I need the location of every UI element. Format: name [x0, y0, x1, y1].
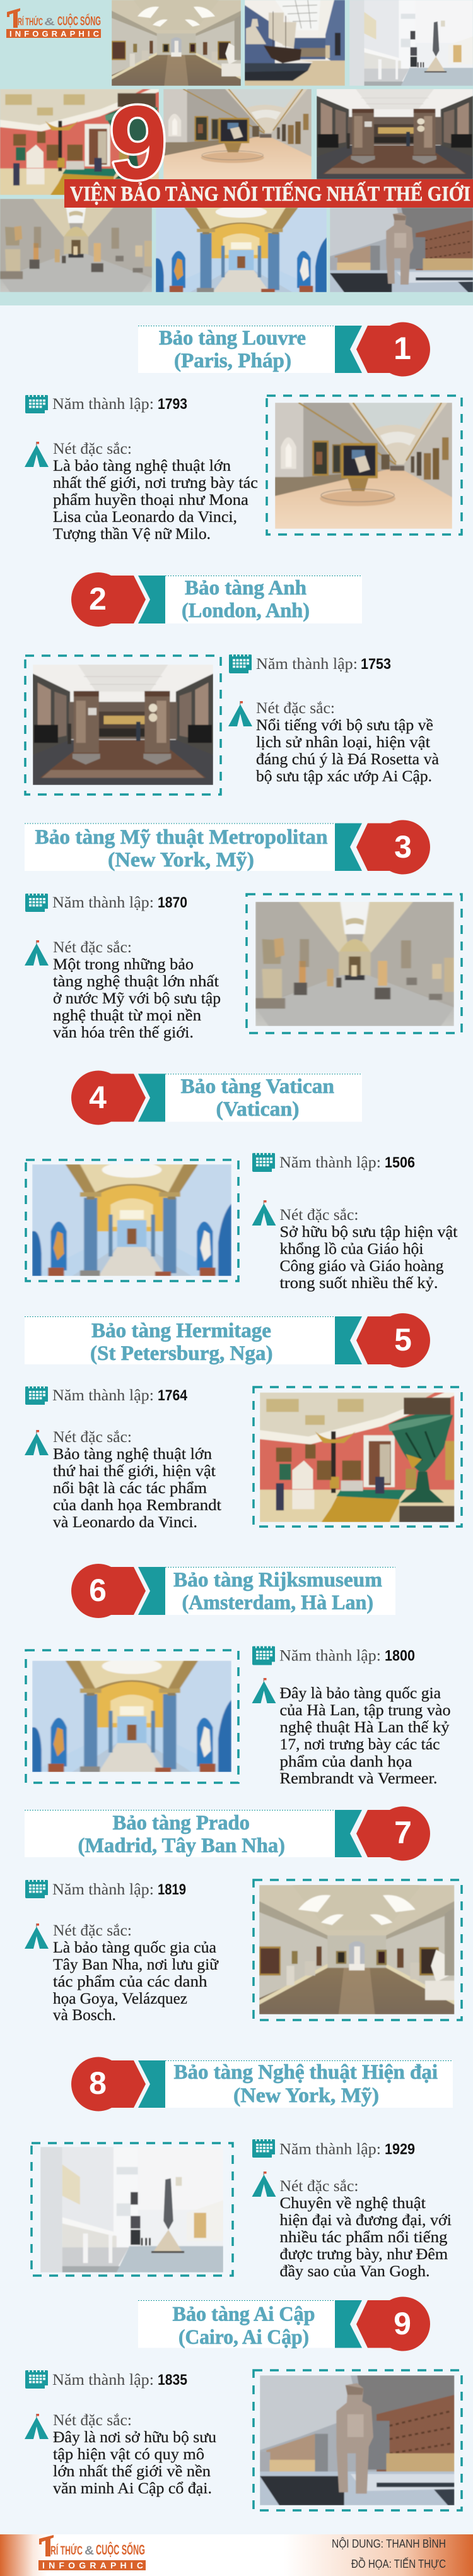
- heading 8: [71, 2057, 453, 2112]
- hero photo: Vatican: [156, 206, 327, 292]
- highlights: Lisa của Leonardo da Vinci,: [53, 509, 237, 526]
- highlights: nhất thế giới, nơi trưng bày tác: [53, 475, 258, 492]
- founding year: 1506: [385, 1154, 415, 1171]
- footer logo: [38, 2535, 146, 2570]
- highlights: Tượng thần Vệ nữ Milo.: [53, 526, 211, 543]
- highlights: nhiều tác phẩm nổi tiếng: [280, 2229, 448, 2246]
- highlights: Rembrandt và Vermeer.: [280, 1770, 438, 1787]
- heading 2: Bảo tàng Anh: [185, 577, 307, 600]
- founding year: Năm thành lập:: [279, 1647, 381, 1665]
- founding year: 1764: [158, 1387, 188, 1404]
- heading 9: (Cairo, Ai Cập): [178, 2326, 309, 2349]
- photo frame: [26, 1160, 238, 1281]
- panel: 1 Louvre: [25, 322, 462, 543]
- highlights: bộ sưu tập xác ướp Ai Cập.: [256, 768, 432, 785]
- highlights: Đây là bảo tàng quốc gia: [280, 1685, 441, 1702]
- heading 7: (Madrid, Tây Ban Nha): [78, 1835, 285, 1857]
- highlights: Là bảo tàng nghệ thuật lớn: [53, 458, 231, 475]
- logo: &: [44, 16, 55, 28]
- highlights: Nét đặc sắc:: [53, 2412, 132, 2429]
- highlights: [228, 700, 439, 785]
- heading 2: [71, 572, 362, 627]
- heading 9: 9: [394, 2306, 411, 2341]
- logo: CUỘC SỐNG: [57, 13, 101, 28]
- heading 6: (Amsterdam, Hà Lan): [182, 1592, 373, 1614]
- heading 3: (New York, Mỹ): [108, 849, 254, 871]
- highlights: Là bảo tàng quốc gia của: [53, 1939, 216, 1956]
- highlights: lớn nhất thế giới về nền: [53, 2463, 211, 2480]
- founding year: 1793: [158, 396, 187, 413]
- heading 2: 2: [89, 581, 107, 617]
- highlights: Nét đặc sắc:: [53, 939, 132, 956]
- heading 5: (St Petersburg, Nga): [90, 1342, 272, 1365]
- heading 3: 3: [394, 829, 412, 865]
- highlights: nổi bật là các tác phẩm: [53, 1480, 207, 1497]
- highlights: tàng nghệ thuật lớn nhất: [53, 973, 219, 990]
- highlights: khổng lồ của Giáo hội: [280, 1241, 424, 1258]
- hero photo: British Museum: [317, 89, 473, 179]
- founding year: Năm thành lập:: [52, 396, 154, 413]
- photo frame: [26, 1650, 238, 1783]
- founding year: 1929: [385, 2141, 415, 2158]
- heading 7: 7: [394, 1815, 412, 1850]
- founding year: Năm thành lập:: [52, 894, 154, 911]
- panel: 5 Hermitage: [25, 1313, 462, 1531]
- panel: 9 Egypt: [25, 2297, 462, 2510]
- heading 6: Bảo tàng Rijksmuseum: [173, 1569, 382, 1592]
- highlights: [25, 1922, 219, 2024]
- highlights: phẩm huyền thoại như Mona: [53, 492, 248, 509]
- founding year: [25, 1385, 188, 1405]
- highlights: và Bosch.: [53, 2007, 116, 2024]
- panel: 6 Rijksmuseum: [26, 1564, 450, 1787]
- photo frame: [254, 2370, 462, 2510]
- logo: RÍ THỨC: [18, 16, 43, 28]
- founding year: [252, 1645, 415, 1665]
- highlights: Một trong những bảo: [53, 956, 194, 973]
- panel: 3 Metropolitan: [25, 820, 462, 1041]
- highlights: Nổi tiếng với bộ sưu tập về: [256, 717, 433, 734]
- highlights: Tây Ban Nha, nơi lưu giữ: [53, 1956, 219, 1973]
- founding year: [25, 2369, 187, 2389]
- highlights: họa Goya, Velázquez: [53, 1990, 187, 2007]
- panel: hero banner: [0, 0, 473, 305]
- founding year: [252, 1152, 415, 1172]
- highlights: Công giáo và Giáo hoàng: [280, 1258, 444, 1275]
- highlights: văn hóa trên thế giới.: [53, 1024, 194, 1041]
- credits: [332, 2537, 446, 2570]
- heading 8: Bảo tàng Nghệ thuật Hiện đại: [174, 2061, 438, 2084]
- highlights: Sở hữu bộ sưu tập hiện vật: [280, 1224, 458, 1241]
- heading 4: Bảo tàng Vatican: [180, 1075, 334, 1098]
- highlights: [252, 1200, 458, 1292]
- heading 1: [138, 322, 430, 376]
- highlights: hiện đại và đương đại, với: [280, 2212, 452, 2229]
- highlights: nghệ thuật Hà Lan thế kỷ: [280, 1719, 450, 1736]
- heading 8: 8: [89, 2065, 107, 2101]
- footer logo: &: [85, 2544, 94, 2558]
- highlights: Nét đặc sắc:: [53, 1429, 132, 1446]
- highlights: Nét đặc sắc:: [280, 1207, 358, 1224]
- highlights: Nét đặc sắc:: [53, 440, 132, 458]
- hero photo: Rijksmuseum ship: [245, 0, 345, 86]
- footer logo: RÍ THỨC: [50, 2544, 83, 2558]
- heading 4: 4: [89, 1080, 107, 1115]
- highlights: Đây là nơi sở hữu bộ sưu: [53, 2429, 217, 2446]
- panel: 4 Vatican: [26, 1070, 458, 1292]
- credits: NỘI DUNG: THANH BÌNH: [332, 2537, 446, 2550]
- highlights: Nét đặc sắc:: [280, 2178, 358, 2195]
- logo: INFOGRAPHIC: [9, 29, 100, 38]
- highlights: trong suốt nhiều thế kỷ.: [280, 1275, 438, 1292]
- highlights: 17, nơi trưng bày các tác: [280, 1736, 440, 1753]
- hero photo: Egypt: [330, 208, 473, 292]
- heading 5: Bảo tàng Hermitage: [91, 1320, 271, 1342]
- panel: 8 Modern Art: [32, 2057, 453, 2280]
- heading 1: Bảo tàng Louvre: [159, 327, 306, 350]
- highlights: tác phẩm của các danh: [53, 1973, 207, 1990]
- heading 7: Bảo tàng Prado: [112, 1812, 250, 1835]
- highlights: [252, 2171, 452, 2280]
- founding year: Năm thành lập:: [52, 1387, 154, 1404]
- hero photo: Prado: [112, 0, 241, 86]
- footer logo: CUỘC SỐNG: [96, 2541, 145, 2558]
- highlights: Chuyên về nghệ thuật: [280, 2195, 426, 2212]
- highlights: lịch sử nhân loại, hiện vật: [256, 734, 430, 751]
- highlights: nghệ thuật từ mọi nền: [53, 1007, 202, 1024]
- highlights: [25, 2412, 217, 2497]
- highlights: ở nước Mỹ với bộ sưu tập: [53, 990, 221, 1007]
- heading 6: 6: [89, 1573, 107, 1608]
- highlights: [252, 1678, 450, 1787]
- heading 2: (London, Anh): [182, 600, 310, 622]
- highlights: và Leonardo da Vinci.: [53, 1514, 197, 1531]
- heading 1: 1: [394, 331, 411, 366]
- highlights: được trưng bày, như Đêm: [280, 2246, 448, 2263]
- hero photo: Louvre: [163, 89, 312, 179]
- founding year: [25, 394, 187, 413]
- photo frame: [254, 1387, 462, 1527]
- heading 9: Bảo tàng Ai Cập: [173, 2303, 315, 2326]
- highlights: Nét đặc sắc:: [53, 1922, 132, 1939]
- founding year: 1870: [158, 894, 187, 911]
- founding year: Năm thành lập:: [279, 1154, 381, 1171]
- panel: 7 Prado: [25, 1806, 462, 2024]
- highlights: [25, 440, 258, 543]
- founding year: 1835: [158, 2372, 187, 2389]
- heading 4: [71, 1070, 362, 1125]
- highlights: thứ hai thế giới, hiện vật: [53, 1463, 216, 1480]
- big number 9: 9: [109, 85, 167, 201]
- highlights: phẩm của danh họa: [280, 1753, 412, 1771]
- footer: [0, 2534, 473, 2576]
- credits: ĐỒ HỌA: TIẾN THỰC: [351, 2557, 446, 2570]
- logo: [6, 8, 101, 38]
- heading 5: 5: [394, 1322, 412, 1357]
- heading 8: (New York, Mỹ): [233, 2084, 379, 2107]
- hero photo: Metropolitan: [0, 199, 152, 292]
- footer logo: INFOGRAPHIC: [42, 2560, 143, 2570]
- heading 4: (Vatican): [216, 1098, 299, 1121]
- founding year: [25, 892, 187, 912]
- highlights: Bảo tàng nghệ thuật lớn: [53, 1446, 213, 1463]
- founding year: [252, 2138, 415, 2158]
- highlights: đầy sao của Van Gogh.: [280, 2263, 430, 2280]
- photo frame: [25, 656, 221, 795]
- heading 3: Bảo tàng Mỹ thuật Metropolitan: [35, 826, 328, 849]
- heading 1: (Paris, Pháp): [174, 350, 291, 372]
- highlights: tập hiện vật có quy mô: [53, 2446, 204, 2463]
- panel: 2 British Museum: [25, 572, 439, 795]
- photo frame: [32, 2143, 233, 2276]
- vase seen through the nine: [126, 119, 151, 144]
- founding year: Năm thành lập:: [279, 2141, 381, 2158]
- founding year: Năm thành lập:: [256, 656, 358, 673]
- photo frame: [247, 894, 462, 1033]
- highlights: [25, 939, 221, 1041]
- hero photo: Hermitage: [0, 89, 159, 195]
- founding year: Năm thành lập:: [52, 1881, 154, 1898]
- photo frame: [267, 396, 462, 535]
- heading 6: [71, 1564, 395, 1618]
- heading 3: [25, 820, 430, 875]
- founding year: Năm thành lập:: [52, 2372, 154, 2389]
- founding year: 1800: [385, 1647, 415, 1665]
- highlights: của Hà Lan, tập trung vào: [280, 1702, 450, 1719]
- highlights: [25, 1429, 221, 1531]
- hero photo: Modern Art: [349, 0, 473, 86]
- heading 5: [25, 1313, 430, 1368]
- highlights: Nét đặc sắc:: [256, 700, 335, 717]
- founding year: 1753: [361, 656, 391, 673]
- founding year: [25, 1879, 186, 1898]
- heading 7: [25, 1806, 430, 1860]
- heading 9: [138, 2297, 430, 2351]
- highlights: đáng chú ý là Đá Rosetta và: [256, 751, 439, 768]
- photo frame: [254, 1880, 462, 2020]
- founding year: [229, 653, 391, 673]
- highlights: của danh họa Rembrandt: [53, 1497, 221, 1514]
- highlights: văn minh Ai Cập cổ đại.: [53, 2480, 212, 2497]
- founding year: 1819: [158, 1881, 186, 1898]
